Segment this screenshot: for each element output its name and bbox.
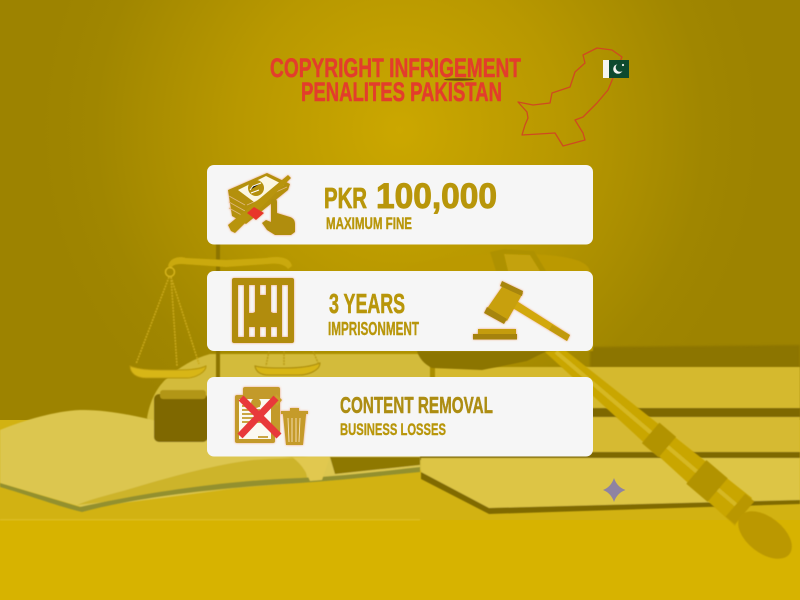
panel: imprisonment: IMPRISONMENT: [328, 319, 419, 339]
scales of justice: [130, 240, 320, 380]
gavel: [400, 249, 800, 568]
icon: Pakistan flag: [603, 60, 629, 78]
panel: maximum fine: MAXIMUM FINE: [326, 214, 412, 233]
panel: imprisonment: [207, 271, 593, 351]
icon: removed document and trash can: [235, 387, 308, 445]
panel: content removal: [207, 377, 593, 456]
title: COPYRIGHT INFRIGEMENT: [270, 53, 521, 83]
icon: money stack crossed out: [228, 173, 295, 235]
panel: maximum fine: PKR: [324, 183, 367, 215]
panel: imprisonment: 3 YEARS: [329, 288, 405, 319]
panel: content removal: CONTENT REMOVAL: [340, 392, 493, 418]
panel: maximum fine: 100,000: [376, 177, 497, 216]
icon: prison bars with prisoner: [232, 278, 294, 343]
stack of books: [420, 367, 800, 514]
open book: [0, 354, 430, 512]
icon: four-point star: [603, 478, 626, 502]
panel: content removal: BUSINESS LOSSES: [340, 420, 446, 439]
title: [270, 53, 521, 107]
panel: maximum fine: [207, 165, 593, 244]
icon: Pakistan map outline: [518, 48, 622, 146]
icon: gavel: [473, 281, 570, 341]
title: PENALITES PAKISTAN: [301, 77, 502, 107]
